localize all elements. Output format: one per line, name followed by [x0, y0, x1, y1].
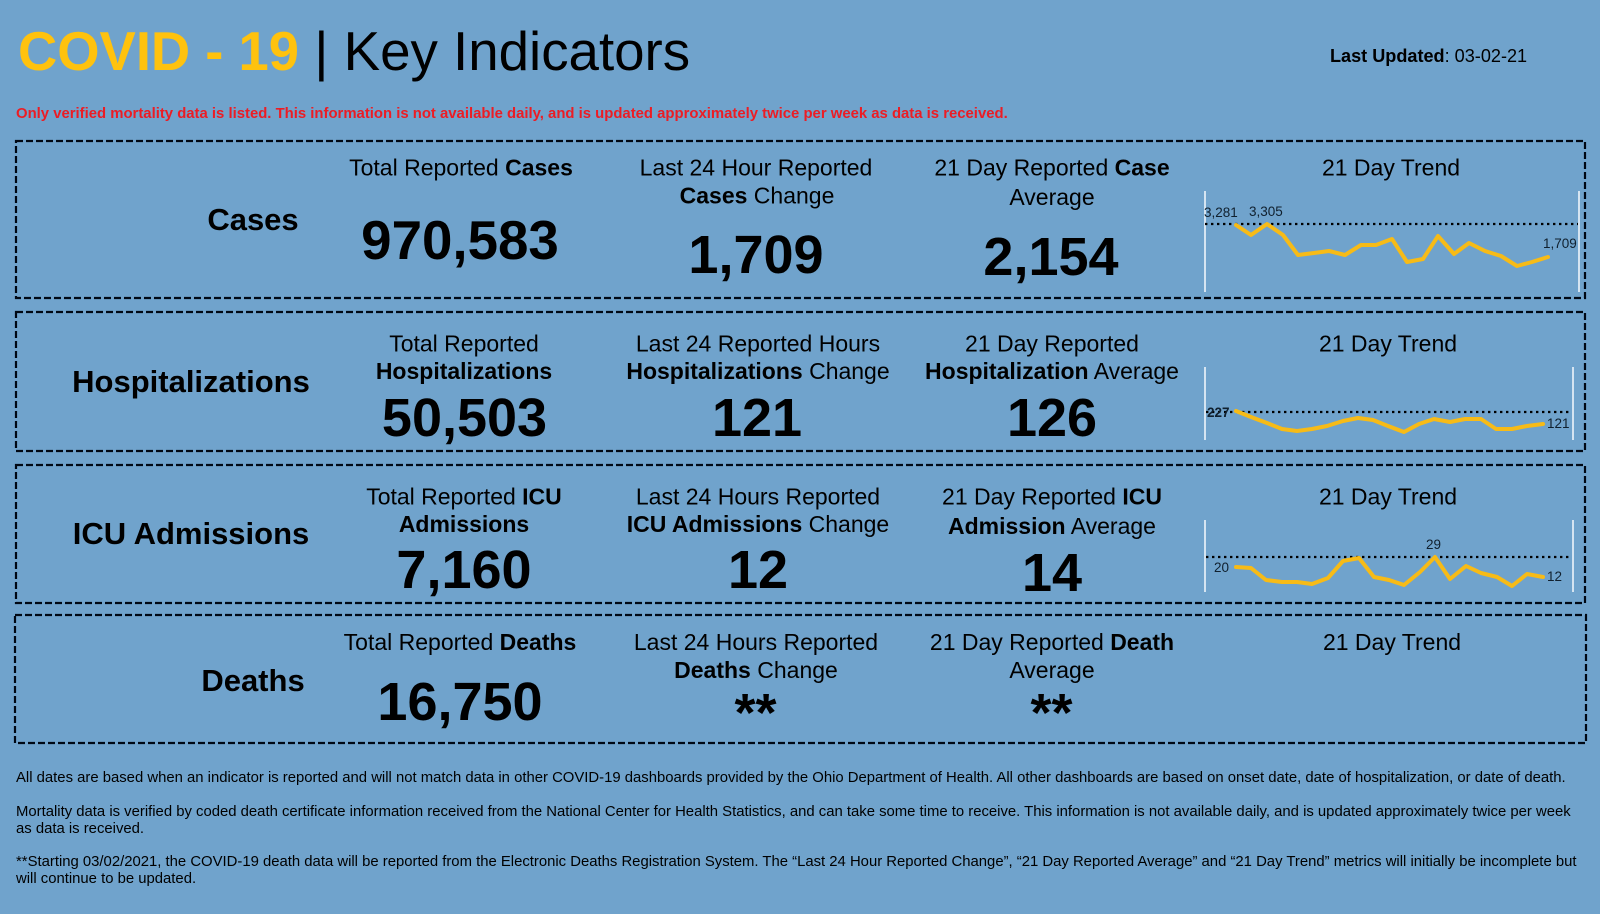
cases label: Cases — [207, 202, 299, 237]
footnotes: **Starting 03/02/2021, the COVID-19 death data will be reported from the Electronic Deaths Registration System. The “Last 24 Hour Reported Change”, “21 Day Reported Average” and “21 Day Trend” metrics will initially be incomplete but — [16, 854, 1577, 870]
last 24 hospitalizations change: 121 — [712, 388, 802, 448]
21 day hospitalization average: 21 Day Reported — [965, 330, 1139, 356]
last 24 hospitalizations change: Hospitalizations Change — [626, 358, 890, 384]
red note: Only verified mortality data is listed. This information is not available daily, and is updated approximately twice per week as data is received. — [16, 106, 1008, 122]
total reported cases: Total Reported Cases — [349, 154, 573, 180]
21 day case average: Average — [1009, 184, 1095, 210]
hospitalizations trend chart — [1205, 330, 1573, 440]
total deaths — [344, 629, 576, 732]
21 day case average: 21 Day Reported Case — [934, 154, 1170, 180]
total hospitalizations — [376, 330, 552, 448]
last 24 icu change: Last 24 Hours Reported — [636, 484, 880, 510]
title: COVID - 19 | Key Indicators — [18, 20, 690, 82]
footnotes — [15, 770, 1577, 887]
panel: deaths — [15, 615, 1586, 743]
deaths trend heading: 21 Day Trend — [1323, 629, 1461, 655]
icu trend chart: 21 Day Trend — [1319, 484, 1457, 510]
icu trend chart: 12 — [1547, 569, 1562, 584]
last 24 hospitalizations change: Last 24 Reported Hours — [636, 330, 880, 356]
footnotes: All dates are based when an indicator is reported and will not match data in other COVID-19 dashboards provided by the Ohio Department of Health. All other dashboards are based on onset date, date of hospitalization, or date of death. — [16, 770, 1566, 786]
total icu admissions: Total Reported ICU — [366, 484, 562, 510]
cases trend chart: 3,305 — [1249, 204, 1283, 219]
total hospitalizations: Hospitalizations — [376, 358, 552, 384]
icu trend chart — [1205, 484, 1573, 592]
total hospitalizations: 50,503 — [382, 388, 547, 448]
21 day icu average: 21 Day Reported ICU — [942, 484, 1162, 510]
total reported cases — [349, 154, 573, 271]
last 24 icu change — [627, 484, 889, 600]
last 24 hour cases change — [640, 154, 872, 285]
cases trend chart: 21 Day Trend — [1322, 154, 1460, 180]
21 day death average: Average — [1009, 657, 1095, 683]
last 24 icu change: 12 — [728, 540, 788, 600]
21 day hospitalization average — [925, 330, 1179, 448]
hospitalizations trend chart: 121 — [1547, 416, 1570, 431]
panel: hospitalizations — [16, 312, 1585, 451]
last 24 deaths change: ** — [734, 683, 777, 743]
panel: cases — [16, 141, 1585, 298]
hospitalizations trend chart: 21 Day Trend — [1319, 330, 1457, 356]
last 24 hour cases change: Cases Change — [680, 182, 834, 208]
last 24 icu change: ICU Admissions Change — [627, 511, 889, 537]
cases trend chart: 1,709 — [1543, 236, 1577, 251]
last 24 hospitalizations change — [626, 330, 890, 448]
icu label: ICU Admissions — [73, 516, 309, 551]
total deaths: Total Reported Deaths — [344, 629, 576, 655]
footnotes: as data is received. — [16, 821, 144, 837]
last 24 hour cases change: 1,709 — [688, 225, 824, 285]
last 24 deaths change — [634, 629, 878, 743]
last 24 deaths change: Deaths Change — [674, 657, 838, 683]
21 day icu average: Admission Average — [948, 513, 1156, 539]
total icu admissions — [366, 484, 562, 600]
total reported cases: 970,583 — [361, 209, 559, 271]
21 day icu average — [942, 484, 1162, 603]
footnotes: will continue to be updated. — [15, 871, 196, 887]
total hospitalizations: Total Reported — [389, 330, 539, 356]
21 day case average — [934, 154, 1170, 287]
hospitalizations trend chart: 227 — [1207, 405, 1230, 420]
hospitalizations label: Hospitalizations — [72, 364, 310, 399]
21 day case average: 2,154 — [983, 227, 1119, 287]
footnotes: Mortality data is verified by coded death certificate information received from the National Center for Health Statistics, and can take some time to receive. This information is not available daily, and is updated approximately twice per week — [16, 804, 1571, 820]
21 day death average: ** — [1030, 683, 1073, 743]
last updated: Last Updated: 03-02-21 — [1330, 46, 1527, 66]
icu trend chart: 20 — [1214, 560, 1229, 575]
icu trend chart: 29 — [1426, 537, 1441, 552]
last 24 deaths change: Last 24 Hours Reported — [634, 629, 878, 655]
21 day icu average: 14 — [1022, 543, 1082, 603]
21 day hospitalization average: 126 — [1007, 388, 1097, 448]
21 day death average: 21 Day Reported Death — [930, 629, 1174, 655]
cases trend chart — [1204, 154, 1579, 292]
panel: icu admissions — [16, 465, 1585, 603]
total deaths: 16,750 — [377, 672, 543, 732]
last 24 hour cases change: Last 24 Hour Reported — [640, 154, 872, 180]
total icu admissions: Admissions — [399, 511, 529, 537]
21 day hospitalization average: Hospitalization Average — [925, 358, 1179, 384]
deaths label: Deaths — [201, 663, 305, 698]
cases trend chart: 3,281 — [1204, 205, 1238, 220]
21 day death average — [930, 629, 1174, 743]
total icu admissions: 7,160 — [396, 540, 532, 600]
